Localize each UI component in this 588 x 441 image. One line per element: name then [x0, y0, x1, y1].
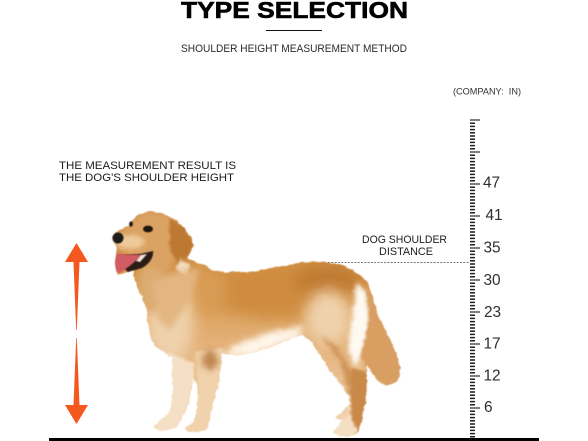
ruler numbers: 47	[483, 174, 500, 192]
ruler numbers: 17	[484, 336, 501, 352]
icon: orange double arrow	[65, 243, 88, 424]
height ruler	[470, 120, 480, 437]
dog mouth	[120, 251, 153, 272]
measurement note: THE DOG'S SHOULDER HEIGHT	[59, 172, 234, 184]
minor ticks	[470, 123, 475, 437]
ruler numbers: 35	[484, 240, 501, 256]
unit label: (COMPANY: IN)	[453, 86, 521, 98]
dog nose	[112, 232, 124, 244]
ruler numbers: 30	[484, 272, 501, 289]
dog shoulder label	[362, 234, 447, 258]
floor line	[49, 438, 539, 441]
ruler numbers: 6	[484, 399, 493, 416]
dog shoulder label: DOG SHOULDER	[362, 234, 447, 246]
major ticks	[470, 120, 480, 408]
dog body	[105, 205, 405, 440]
subtitle: SHOULDER HEIGHT MEASUREMENT METHOD	[181, 43, 407, 55]
ruler numbers: 12	[484, 368, 501, 384]
measurement note	[59, 160, 236, 184]
ruler numbers: 41	[486, 207, 503, 224]
dog shoulder label: DISTANCE	[379, 246, 433, 258]
dog tongue	[115, 253, 142, 273]
dog teeth	[136, 254, 147, 262]
dog eyes	[129, 221, 153, 232]
ruler numbers: 23	[484, 304, 501, 321]
title underline	[266, 30, 322, 31]
measurement note: THE MEASUREMENT RESULT IS	[59, 160, 236, 172]
ruler numbers	[483, 174, 503, 416]
shoulder dashed line	[328, 262, 470, 264]
golden retriever	[105, 205, 405, 440]
